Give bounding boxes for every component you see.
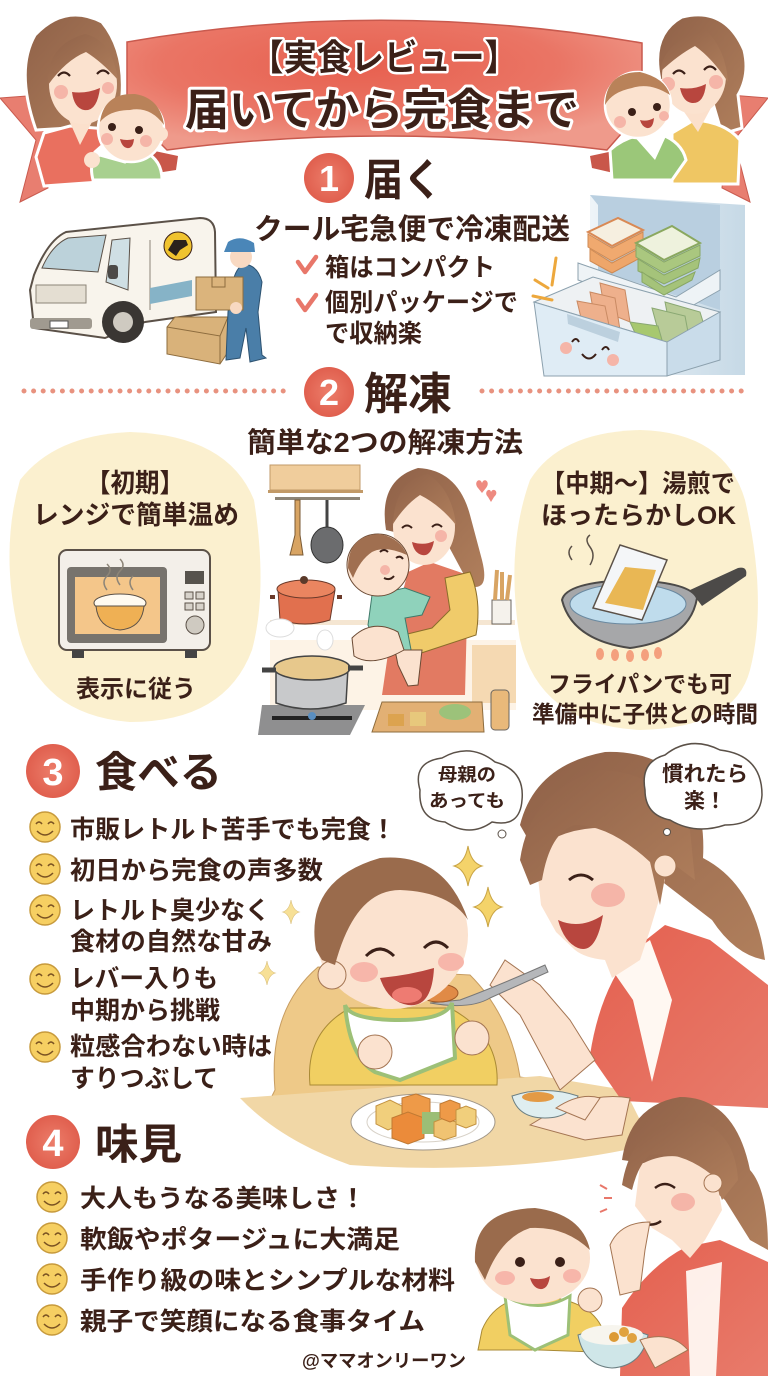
thought bubble: mother: 母親の xyxy=(438,765,496,785)
item 1: 市販レトルト苦手でも完食！ xyxy=(70,816,396,844)
section 3 list xyxy=(30,812,396,1093)
number badge 2 xyxy=(304,367,354,417)
item 4 xyxy=(30,964,220,1025)
thought bubble: easy once used: 楽！ xyxy=(684,790,726,813)
number badge 3: 3 xyxy=(42,752,64,794)
section 4 heading xyxy=(26,1115,182,1169)
green packs xyxy=(630,302,704,345)
item 3: レトルト臭少なく xyxy=(70,897,270,925)
thought bubble: easy once used xyxy=(644,744,762,836)
illustration: delivery van and courier xyxy=(30,218,266,364)
number badge 4: 4 xyxy=(42,1123,64,1165)
mother xyxy=(420,752,768,1140)
panel: microwave method: レンジで簡単温め xyxy=(33,500,239,530)
item 5 xyxy=(30,1032,272,1093)
banner subtitle: 【実食レビュー】 xyxy=(250,37,518,78)
number badge 2: 2 xyxy=(319,372,339,413)
thought bubble: easy once used: 慣れたら xyxy=(662,763,748,786)
baby xyxy=(475,1208,603,1352)
orange pot xyxy=(270,576,342,624)
number badge 4 xyxy=(26,1115,80,1169)
section 4 list xyxy=(37,1182,455,1336)
face xyxy=(635,1156,722,1258)
subheading: 簡単な2つの解凍方法 xyxy=(247,427,523,458)
section 3 heading xyxy=(26,744,222,798)
mother xyxy=(610,1097,768,1376)
panel note: 表示に従う xyxy=(76,676,196,703)
cutting board xyxy=(372,702,484,732)
footer credit: @ママオンリーワン xyxy=(302,1351,466,1371)
panel background xyxy=(514,430,758,730)
salmon packs xyxy=(577,283,630,330)
banner title: 届いてから完食まで xyxy=(185,86,579,135)
plate with food cubes xyxy=(351,1094,495,1150)
fringe xyxy=(520,770,695,905)
item 1: 大人もうなる美味しさ！ xyxy=(80,1185,366,1213)
item 3 xyxy=(30,895,272,956)
item 3: 手作り級の味とシンプルな材料 xyxy=(80,1267,455,1295)
accent marks xyxy=(600,1185,612,1212)
thought bubble: mother xyxy=(418,751,522,838)
baby in arms xyxy=(347,534,430,686)
check item 2: 個別パッケージで xyxy=(325,289,518,317)
ribbon body xyxy=(127,20,642,150)
panel: boil-in-bag method: 準備中に子供との時間 xyxy=(532,701,758,727)
header banner xyxy=(0,20,768,202)
item 4: レバー入りも xyxy=(70,965,218,993)
section 1 text block xyxy=(254,213,570,348)
icon: microwave xyxy=(59,550,210,658)
mother xyxy=(382,468,496,695)
ponytail and hair back xyxy=(520,752,765,960)
illustration: freezer with meal packs xyxy=(533,195,745,376)
high chair xyxy=(270,967,540,1100)
panel: boil-in-bag method: ほったらかしOK xyxy=(541,502,736,530)
check item 2: で収納楽 xyxy=(325,320,422,348)
illustration: mother and baby right xyxy=(605,15,746,184)
ribbon tails xyxy=(0,95,768,202)
item 5: すりつぶして xyxy=(70,1065,218,1093)
item 3: 食材の自然な甘み xyxy=(70,928,272,956)
green containers xyxy=(636,226,700,295)
steel pot on stove xyxy=(258,619,365,735)
hand xyxy=(610,1222,650,1295)
small bowl xyxy=(512,1090,600,1120)
heading text: 味見 xyxy=(95,1121,182,1168)
illustration: mother and baby left xyxy=(25,15,168,186)
baby xyxy=(310,858,497,1085)
panel notes: フライパンでも可 xyxy=(548,671,732,697)
icon: frying pan with pouch xyxy=(562,535,746,662)
face xyxy=(535,828,665,978)
item 4: 親子で笑顔になる食事タイム xyxy=(80,1308,425,1336)
item 4: 中期から挑戦 xyxy=(70,997,220,1025)
panel: microwave method xyxy=(9,432,261,722)
bowl hand xyxy=(530,1097,630,1140)
arm and hand xyxy=(490,960,595,1090)
item 5: 粒感合わない時は xyxy=(70,1033,272,1061)
table xyxy=(240,1076,640,1168)
panel heading: 【初期】 xyxy=(86,468,184,498)
rice bowl xyxy=(578,1325,688,1368)
illustration: mother holding baby in kitchen xyxy=(258,465,516,735)
number badge 1: 1 xyxy=(319,158,339,199)
hair and ponytail xyxy=(622,1097,768,1250)
panel background xyxy=(9,432,261,722)
lead line: クール宅急便で冷凍配送 xyxy=(254,213,570,246)
number badge 3 xyxy=(26,744,80,798)
panel: boil-in-bag method xyxy=(514,430,758,730)
item 2: 軟飯やポタージュに大満足 xyxy=(80,1226,400,1254)
carried parcel xyxy=(196,277,243,314)
van logo xyxy=(164,232,192,260)
check item 1: 箱はコンパクト xyxy=(325,254,495,282)
fringe xyxy=(622,1118,738,1200)
section 2 heading xyxy=(247,367,523,458)
panel heading: 【中期～】湯煎で xyxy=(541,470,735,498)
utensil jar and shaker xyxy=(491,570,511,730)
section 2 divider xyxy=(24,388,745,394)
lower parcel xyxy=(167,317,228,364)
cardigan xyxy=(620,1240,768,1376)
drawer interior xyxy=(534,277,720,342)
courier xyxy=(224,238,266,362)
van body xyxy=(30,218,216,338)
cardigan xyxy=(590,925,768,1108)
illustration: mother tasting with baby xyxy=(475,1097,768,1376)
orange containers xyxy=(588,218,643,273)
features xyxy=(569,875,593,880)
thought bubble: mother: あっても xyxy=(429,791,505,811)
heading text: 届く xyxy=(364,156,442,205)
sparkles xyxy=(259,846,502,985)
check item 2 xyxy=(298,289,518,348)
heading text: 解凍 xyxy=(364,370,452,419)
illustration: baby eating with mother xyxy=(240,752,768,1168)
kitchen background xyxy=(268,465,516,710)
heading text: 食べる xyxy=(95,749,222,796)
drawer front xyxy=(534,302,667,376)
section 1 heading xyxy=(304,153,442,205)
item 2: 初日から完食の声多数 xyxy=(70,857,323,885)
